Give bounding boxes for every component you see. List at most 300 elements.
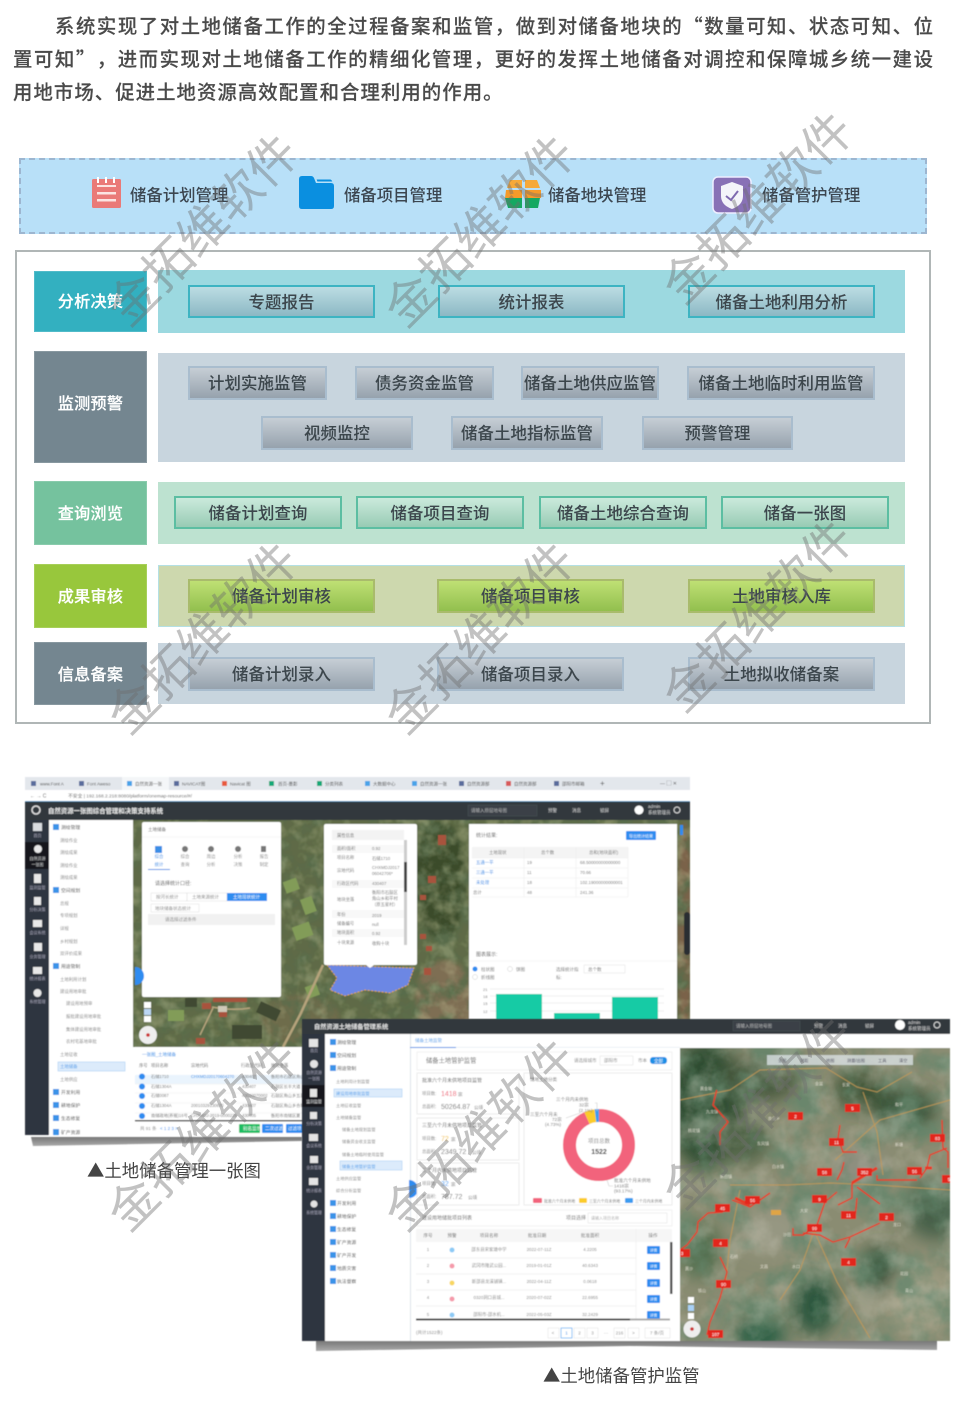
text: protection management: 储备管护管理	[762, 187, 860, 205]
app header: admin	[648, 804, 661, 809]
popup: attribute info: 0.92	[372, 846, 381, 851]
pagination: (共计1522条)	[416, 1329, 443, 1336]
map with project markers: 水口	[792, 1263, 800, 1269]
panel: statistics result with bar chart: 标:	[556, 974, 562, 981]
label: review: 成果审核	[58, 588, 123, 606]
button: 储备计划查询	[209, 504, 307, 522]
stat cards	[417, 1073, 519, 1205]
map with project markers: 83	[935, 1136, 940, 1141]
map with project markers: 3	[681, 1251, 684, 1256]
results table: 430407	[242, 1103, 257, 1108]
panel: land reserve statistics: 综合	[155, 853, 164, 860]
map with project markers: 9	[818, 1197, 821, 1202]
results table: 430407	[242, 1084, 257, 1089]
label: monitoring	[34, 351, 147, 463]
tree menu: 耕地保护	[337, 1213, 356, 1220]
tree menu: 耕地保护	[61, 1102, 80, 1109]
stat cards: 三至六个月未供地项目监管	[422, 1122, 482, 1129]
results table: 别名显示	[243, 1125, 261, 1132]
title card: 全部	[654, 1058, 663, 1064]
popup: attribute info: 行政区代码	[337, 880, 359, 887]
panel: statistics result with bar chart	[469, 824, 677, 1020]
button	[721, 496, 889, 529]
popup: attribute info: 属性信息	[337, 832, 355, 839]
map with project markers: 文昌	[760, 1263, 768, 1269]
project list table: 2022-04-11Z	[527, 1279, 552, 1284]
app header: 消息	[572, 807, 581, 814]
watermarks: 金拓维软件	[653, 1008, 864, 1219]
tree menu: 土地储备	[60, 1063, 78, 1070]
project list table: 详情	[650, 1280, 657, 1286]
app header	[302, 1019, 950, 1034]
tree menu: 建设用地审批监管	[336, 1090, 370, 1097]
band: review	[158, 565, 905, 627]
stat cards: 总面积:	[422, 1193, 436, 1200]
popup: attribute info: 06042706*	[372, 871, 393, 876]
stat cards: 总面积:	[422, 1148, 436, 1155]
band: filing	[158, 643, 905, 704]
button: 土地审核入库	[732, 588, 831, 606]
project list table: 5	[427, 1312, 430, 1317]
results table: 43020070002	[242, 1093, 268, 1098]
tree menu	[330, 1034, 418, 1341]
stat cards: 项目数:	[422, 1135, 436, 1142]
project list table: 2022-07-11Z	[527, 1247, 552, 1252]
project list table: 2022-05-03Z	[526, 1312, 552, 1317]
panel: statistics result with bar chart: 12	[483, 1009, 488, 1014]
sidebar: 系统管理	[306, 1210, 322, 1215]
project list table: 32.2429	[582, 1312, 598, 1317]
browser tabs: 分类列表	[325, 780, 343, 788]
panel: statistics result with bar chart: 总个数	[588, 966, 602, 973]
map with project markers: 长安	[842, 1081, 850, 1087]
popup: attribute info: 项目名称	[337, 854, 355, 861]
project list table: 预警	[447, 1232, 457, 1239]
map with project markers: 桃花镇	[688, 1127, 700, 1133]
button	[688, 579, 875, 613]
results table: 地块坐落	[271, 1062, 289, 1069]
map with project markers: 4	[719, 1241, 722, 1246]
button	[174, 496, 342, 529]
button: 储备项目审核	[481, 588, 580, 606]
panel: statistics result with bar chart: 饼图	[516, 966, 525, 973]
popup: attribute info: 0.92	[372, 931, 381, 936]
button: 债务资金监管	[375, 375, 474, 393]
row: analysis decision	[34, 270, 905, 333]
compass	[139, 1002, 157, 1044]
tree menu: 农村宅基地审批	[66, 1038, 97, 1045]
panel: statistics result with bar chart: 总计	[473, 889, 482, 896]
watermarks: 金拓维软件	[653, 103, 864, 314]
popup: attribute info: 收购十块	[372, 940, 390, 947]
tree menu: 生态修复	[337, 1226, 356, 1233]
tree menu: 土地利用计划	[60, 976, 86, 983]
button: 视频监控	[304, 425, 370, 443]
stat cards: 72	[441, 1136, 449, 1143]
results table: CHXMDJ-2019-0000229	[191, 1113, 238, 1118]
watermarks: 金拓维软件	[375, 126, 586, 337]
sidebar	[25, 820, 49, 1135]
popup: attribute info: 角山乡和平村	[372, 895, 398, 902]
sidebar: 统计报表	[30, 975, 46, 981]
app header: 系统管理员	[908, 1025, 931, 1032]
tree menu: 土地征收监管	[336, 1102, 361, 1109]
panel: land reserve statistics: 分析	[207, 861, 216, 868]
donut chart: 32宗	[579, 1102, 589, 1108]
tree menu: 开发利用	[337, 1200, 356, 1207]
sidebar: 会议系统	[306, 1143, 322, 1148]
watermarks: 金拓维软件	[653, 511, 864, 722]
caption: one-map: ▲土地储备管理一张图	[87, 1158, 261, 1183]
screenshot: land reserve protection supervision	[302, 1019, 960, 1353]
panel: statistics result with bar chart: 68.50000000000000	[580, 860, 621, 865]
results table: 石储0087	[151, 1092, 169, 1099]
browser tabs: +	[600, 779, 605, 788]
map with project markers: 11	[834, 1140, 839, 1145]
stat cards: 公顷	[472, 1149, 481, 1156]
stat cards: 公顷	[474, 1104, 483, 1111]
map with project markers: 新塘	[895, 1141, 903, 1147]
donut chart	[524, 1073, 672, 1205]
tree menu: 土地征收	[60, 1051, 78, 1058]
sidebar: 分析决策	[30, 906, 46, 912]
band: monitoring	[158, 353, 905, 462]
map with project markers: 58	[822, 1170, 827, 1175]
tab bar: 储备土地监管	[415, 1037, 442, 1044]
icon: land parcel	[505, 180, 541, 208]
row: monitoring	[34, 351, 905, 463]
title card: 储备土地管护监管	[426, 1056, 476, 1064]
app header: 预警	[814, 1022, 823, 1030]
button	[687, 366, 875, 400]
tree menu: 乡村规划	[60, 938, 78, 945]
map with project markers: 工具	[878, 1058, 887, 1064]
tree menu: 空间规划	[61, 887, 80, 894]
browser tabs: 大数据中心	[373, 780, 396, 788]
row: query	[34, 481, 905, 545]
pagination: ···	[604, 1330, 608, 1336]
results table: < 1 2 3 >	[160, 1126, 178, 1131]
panel: statistics result with bar chart: 五通一平	[476, 859, 494, 866]
tree menu: 用途管制	[61, 963, 80, 970]
results table	[135, 1047, 305, 1135]
panel: statistics result with bar chart: 11	[527, 870, 532, 875]
url bar	[25, 790, 690, 801]
panel: land reserve statistics: 请选择过滤条件	[165, 916, 197, 923]
button: 储备土地利用分析	[716, 294, 847, 312]
watermarks: 金拓维软件	[98, 533, 309, 744]
results table: 石储1304A	[151, 1102, 172, 1109]
button	[539, 496, 707, 529]
button: 储备计划录入	[232, 666, 331, 684]
project list table: 4	[427, 1295, 430, 1300]
results table: 石鼓区角山乡五星	[271, 1092, 305, 1099]
tree menu: 土地储备监管	[336, 1114, 361, 1121]
map with project markers: 白水镇	[772, 1163, 784, 1169]
project list table: 项目名称	[480, 1232, 499, 1239]
stat cards: 项目数:	[422, 1180, 436, 1187]
project list table: 详情	[650, 1312, 657, 1318]
popup: attribute info: 十块来源	[337, 939, 355, 946]
panel: land reserve statistics: 地块储备状态统计	[155, 905, 191, 912]
stat cards: 宗	[458, 1091, 463, 1097]
stat cards: 787.72	[441, 1194, 463, 1201]
button: 储备计划审核	[232, 588, 331, 606]
panel: statistics result with bar chart: 19	[527, 860, 532, 865]
tree menu: 测绘管理	[337, 1039, 356, 1046]
button	[688, 657, 875, 691]
row: review	[34, 564, 905, 628]
stat cards: 2349.72	[441, 1149, 466, 1156]
map with project markers: 东风镇	[757, 1140, 769, 1146]
button: 统计报表	[499, 294, 564, 312]
donut chart: (4.73%)	[545, 1122, 562, 1127]
project list table: 详情	[650, 1296, 657, 1302]
map with project markers: 2	[794, 1114, 797, 1119]
title card	[417, 1052, 672, 1070]
panel: top management band	[19, 158, 927, 234]
donut chart: 72宗	[552, 1116, 562, 1122]
pagination: 1	[565, 1330, 568, 1336]
project list table: 2	[427, 1263, 430, 1268]
browser tabs: 自然资源部	[467, 780, 490, 788]
pagination: <	[552, 1330, 555, 1336]
results table: 南储政地(养殖)16号	[151, 1112, 188, 1119]
tree menu: 生态修复	[61, 1115, 80, 1122]
band: analysis	[158, 270, 905, 333]
browser tabs: 邵阳市邮箱	[562, 780, 585, 788]
results table: 行政区代码	[241, 1062, 263, 1069]
panel: land reserve statistics: 综合	[181, 853, 190, 860]
sidebar: 系统管理	[30, 998, 46, 1004]
popup: attribute info: 年份	[337, 911, 346, 918]
browser tabs: 自然资源一张	[135, 780, 162, 788]
browser tabs	[25, 777, 690, 790]
map with project markers: 金盆	[815, 1080, 823, 1086]
panel: statistics result with bar chart: 18	[483, 994, 488, 999]
tree menu: 用途管制	[337, 1065, 356, 1072]
results table: 共 91 条	[140, 1125, 157, 1132]
panel: land reserve statistics: 决策	[234, 861, 243, 868]
button: 专题报告	[249, 294, 314, 312]
tree menu: 储备资金收支监管	[342, 1138, 376, 1145]
popup: attribute info: CHXMDJ2017	[372, 865, 400, 870]
tree menu: 建设用地审批	[60, 988, 87, 995]
popup: attribute info: 石储1710	[372, 855, 391, 862]
app header: 自然资源一张图综合管理和决策支持系统	[48, 806, 164, 815]
watermarks: 金拓维软件	[98, 125, 309, 336]
button: 土地拟收储备案	[724, 666, 839, 684]
tree menu: 综合分析监管	[336, 1187, 361, 1194]
tree menu: 测绘成果	[60, 849, 78, 856]
label: review	[34, 564, 147, 628]
button	[437, 579, 624, 613]
tree menu: 测绘作业	[60, 837, 78, 844]
sidebar	[302, 1034, 325, 1341]
panel: statistics result with bar chart: 未处理	[476, 879, 490, 886]
pagination: 3	[591, 1330, 594, 1336]
project list table: 2019-01-01Z	[526, 1263, 552, 1268]
project list table: 操作	[648, 1232, 658, 1239]
panel: statistics result with bar chart: 21	[483, 987, 488, 992]
intro paragraph: 用地市场、促进土地资源高效配置和合理利用的作用。	[13, 76, 504, 105]
caption: protection supervision: ▲土地储备管护监管	[543, 1363, 700, 1388]
map with project markers: 沙田	[783, 1232, 791, 1237]
tree menu: 开发利用	[61, 1089, 80, 1096]
pagination	[416, 1328, 670, 1338]
stat cards: 32	[441, 1181, 449, 1188]
panel: land reserve statistics: 土地储备	[148, 826, 166, 833]
button: 计划实施监管	[208, 375, 307, 393]
sidebar: 监测监管	[306, 1099, 322, 1104]
map with project markers: 全图	[778, 1057, 786, 1064]
app header: 消息	[838, 1022, 847, 1030]
stat cards: 项目数:	[422, 1090, 436, 1097]
donut chart: 储地土地分类	[530, 1076, 557, 1083]
donut chart: 三个月内未供地	[556, 1096, 589, 1103]
panel: land reserve statistics: 按河长统计	[156, 894, 179, 900]
map with project markers: 56	[912, 1169, 917, 1174]
project list table: 40.6343	[582, 1263, 598, 1268]
browser tabs: 自然资源部	[514, 780, 537, 788]
map with project markers: 黄沙	[685, 1265, 693, 1271]
map with project markers: 测距	[800, 1057, 808, 1064]
panel: statistics result with bar chart: 15	[483, 1001, 488, 1006]
map with project markers: 黄金坳	[700, 1085, 712, 1091]
button	[438, 285, 625, 318]
watermarks: 金拓维软件	[375, 533, 586, 744]
row: filing	[34, 642, 905, 705]
panel: statistics result with bar chart: 选择统计指	[556, 966, 579, 973]
panel: statistics result with bar chart: 统计结果:	[476, 832, 497, 839]
sidebar: 监测监管	[30, 884, 46, 890]
project list table: 1	[427, 1247, 430, 1252]
sidebar: 业务管理	[30, 953, 46, 959]
popup: attribute info: null	[372, 922, 379, 927]
icon: project folder	[299, 176, 334, 209]
drop shadow	[31, 1137, 302, 1146]
results table: 一张图_土地储备	[142, 1051, 177, 1058]
popup: attribute info: 地块面积	[337, 929, 355, 936]
map with project markers: 测量/出图	[847, 1057, 865, 1064]
popup: attribute info: 衡阳市石鼓区	[372, 889, 398, 896]
project list table: 批准日期	[528, 1232, 547, 1239]
sidebar: 首页	[310, 1048, 318, 1053]
app header: admin	[908, 1020, 921, 1025]
panel: statistics result with bar chart: 图表展示:	[476, 951, 497, 958]
map with project markers: 清空	[899, 1057, 907, 1064]
panel: land reserve statistics: 查询	[181, 861, 190, 868]
button: 储备土地临时利用监管	[699, 375, 863, 393]
button	[261, 416, 413, 450]
donut chart: (2.1%)	[579, 1108, 593, 1113]
button: 预警管理	[685, 425, 750, 443]
tree menu: 空间规划	[337, 1052, 356, 1059]
panel: statistics result with bar chart: 三通一平	[476, 869, 494, 876]
label: filing: 信息备案	[58, 666, 123, 684]
button: 储备项目查询	[391, 504, 489, 522]
donut chart: 批准六个月未供地	[614, 1177, 651, 1184]
tree menu: 专项规划	[60, 912, 78, 919]
title card: 请选择城市	[574, 1057, 597, 1064]
tree menu: 建设用地预审	[66, 1000, 93, 1007]
project list table: 武冈市隆武公园...	[472, 1262, 506, 1269]
panel: statistics result with bar chart: 总个数	[541, 849, 555, 856]
popup: attribute info: 地块坐落	[337, 896, 355, 903]
map with project markers: 大安	[800, 1207, 808, 1213]
popup: attribute info: 储备编号	[337, 920, 354, 927]
browser tabs: 自然资源一张	[420, 780, 447, 788]
results table: 衡阳市南储区夏	[271, 1112, 301, 1119]
button	[688, 285, 875, 318]
project list table: 请输入项目名称	[591, 1214, 619, 1220]
pagination: >	[632, 1330, 635, 1336]
browser tabs: Navicat 图	[230, 782, 251, 788]
map with project markers: 2	[885, 1215, 888, 1220]
label: monitoring: 监测预警	[58, 394, 123, 412]
label: filing	[34, 642, 147, 705]
icon: shield	[712, 176, 752, 214]
tree menu: 矿产资源	[337, 1239, 356, 1246]
project list table: 详情	[650, 1248, 657, 1252]
button	[437, 657, 624, 691]
text: plan management: 储备计划管理	[130, 187, 228, 205]
tree menu: 土地利用计划监管	[336, 1078, 370, 1085]
label: query: 查询浏览	[58, 505, 123, 523]
panel: statistics result with bar chart: 102.19000000000001	[580, 880, 623, 885]
stat cards: 批准六个月未供地项目监管	[422, 1077, 482, 1084]
popup: attribute info: 宗地代码	[337, 867, 355, 874]
tree menu: 集体建设用地审批	[66, 1026, 102, 1033]
panel: statistics result with bar chart: 总和(地块面积)	[589, 849, 619, 856]
tree menu: 测绘成果	[60, 874, 78, 881]
drop shadow	[316, 1341, 937, 1351]
map with project markers: 青山	[905, 1287, 913, 1293]
sidebar: 统计报表	[306, 1188, 322, 1193]
panel: statistics result with bar chart: 48	[527, 890, 532, 895]
button: 储备土地指标监管	[461, 425, 593, 443]
map with project markers: 56	[750, 1198, 755, 1203]
donut chart: (93.17%)	[614, 1188, 633, 1194]
app header: 预警	[548, 807, 557, 814]
text: project management: 储备项目管理	[344, 187, 442, 205]
map with project markers: 石桥	[730, 1253, 738, 1259]
title card: 邵阳市	[604, 1057, 618, 1064]
sidebar: 自然资源	[30, 855, 46, 861]
panel: main framework	[15, 250, 931, 724]
panel: statistics result with bar chart: 柱状图	[481, 966, 495, 973]
watermarks: 金拓维软件	[375, 1030, 586, 1241]
results table: 石储1304A	[151, 1083, 172, 1090]
tree menu: 详规	[60, 925, 69, 932]
app header: 锁屏	[865, 1022, 874, 1030]
map with project markers: 45	[720, 1206, 725, 1211]
project list table: 详情	[650, 1264, 657, 1268]
project list table: 批准面积	[581, 1232, 600, 1239]
project list table: 建设用地储批项目列表	[422, 1214, 472, 1222]
results table: 石储1710	[151, 1073, 169, 1080]
sidebar: 首页	[34, 832, 42, 838]
panel: statistics result with bar chart: 折线图	[481, 974, 495, 981]
tree menu: 储备土地管护监管	[342, 1163, 376, 1170]
panel: land reserve statistics	[135, 822, 281, 997]
button	[188, 285, 375, 318]
page background	[302, 1019, 950, 1341]
donut chart: 三个月内未供地	[635, 1198, 662, 1204]
sidebar: 会议系统	[30, 929, 46, 935]
map with project markers: 352	[861, 1170, 869, 1175]
sidebar: 业务管理	[306, 1165, 322, 1170]
